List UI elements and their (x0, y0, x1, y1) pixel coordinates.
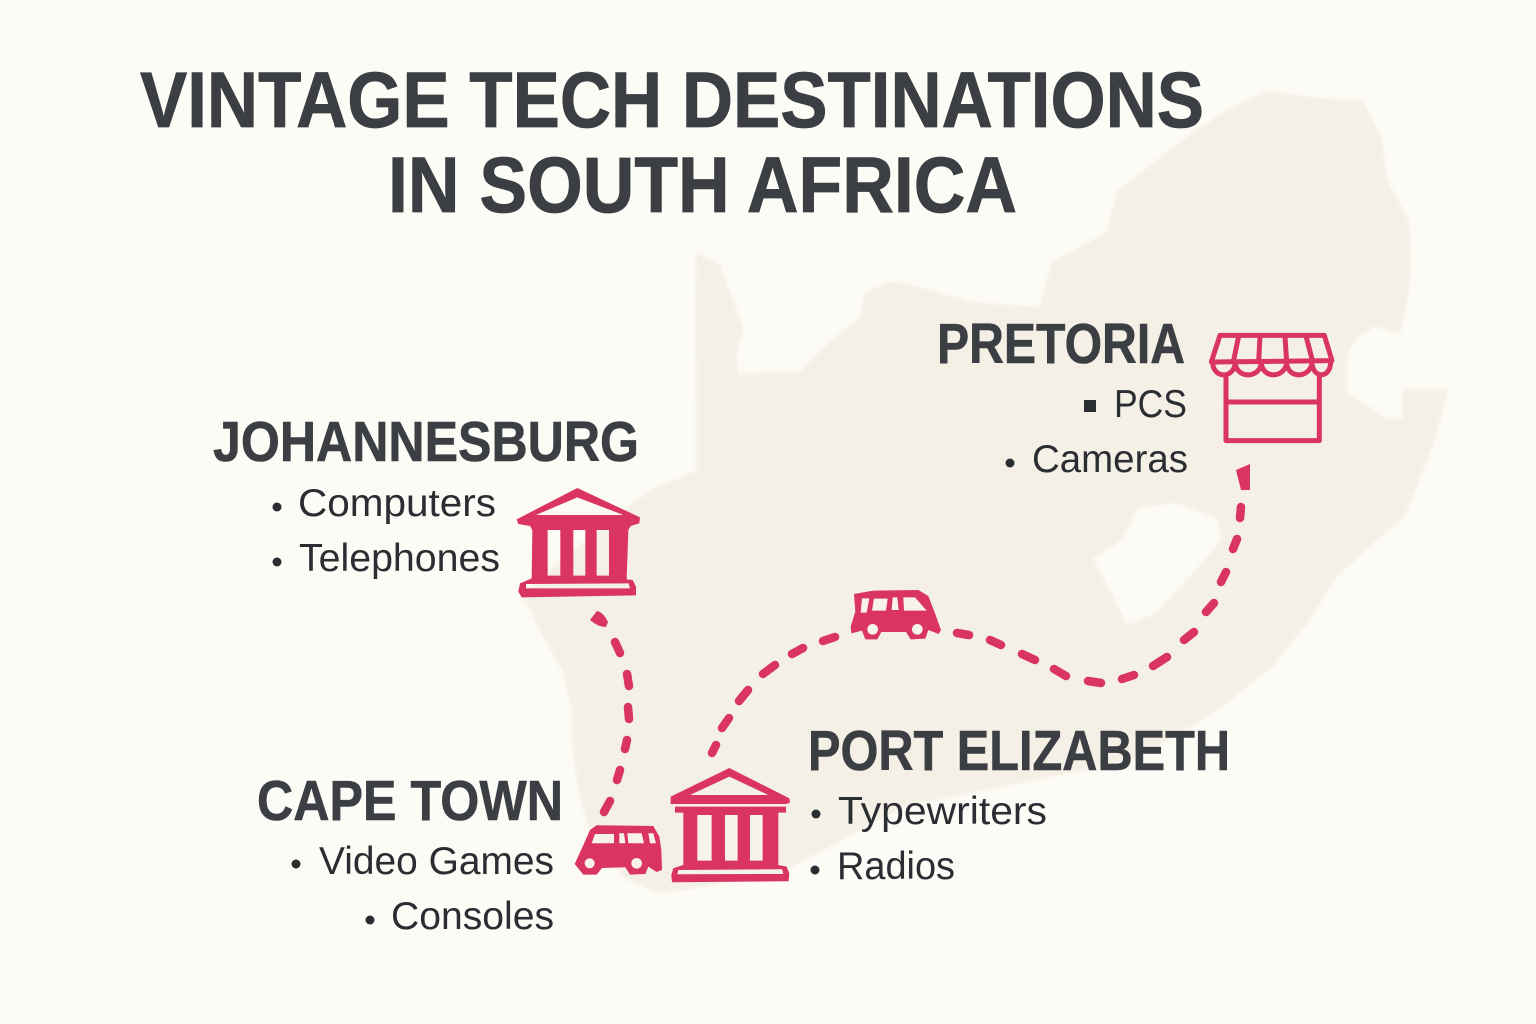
title: VINTAGE TECH DESTINATIONS (140, 55, 1204, 144)
icon: storefront (1211, 335, 1332, 441)
icon: van between Port Elizabeth and Pretoria (851, 590, 941, 639)
Port Elizabeth: heading and list (808, 719, 1230, 888)
Johannesburg: heading and list (213, 410, 639, 580)
Johannesburg: heading and list: JOHANNESBURG (213, 410, 639, 474)
Pretoria: heading and list: PRETORIA (937, 312, 1185, 376)
Port Elizabeth: heading and list: PORT ELIZABETH (808, 719, 1230, 783)
Cape Town: heading and list: CAPE TOWN (257, 769, 563, 833)
title (140, 55, 1204, 229)
Cape Town: heading and list: Consoles (391, 895, 554, 938)
title: IN SOUTH AFRICA (388, 140, 1017, 229)
Cape Town: heading and list: Video Games (319, 840, 554, 883)
route: Cape Town to Johannesburg dashed arrow (590, 611, 629, 812)
icon: Johannesburg museum (517, 488, 640, 597)
map: South Africa silhouette (520, 91, 1449, 893)
Port Elizabeth: heading and list: Typewriters (838, 790, 1047, 833)
icon: Port Elizabeth museum (671, 768, 790, 882)
Cape Town: heading and list (257, 769, 563, 938)
Pretoria: heading and list: Cameras (1032, 438, 1188, 481)
icon: van near Cape Town (575, 825, 662, 875)
Port Elizabeth: heading and list: Radios (837, 845, 955, 888)
route: Port Elizabeth to Pretoria dashed arrow (712, 464, 1250, 753)
Pretoria: heading and list (937, 312, 1188, 481)
Pretoria: heading and list: PCS (1114, 383, 1187, 426)
Johannesburg: heading and list: Telephones (299, 537, 500, 580)
Johannesburg: heading and list: Computers (298, 482, 496, 525)
